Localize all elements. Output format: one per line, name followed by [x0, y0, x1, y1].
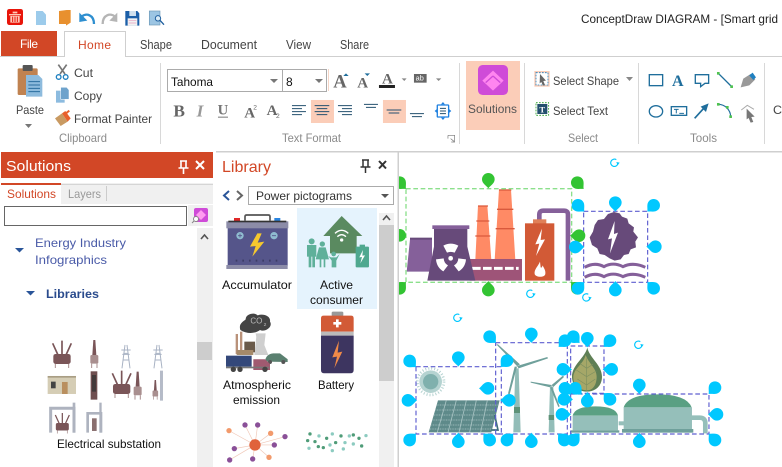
icon: previous library: [224, 191, 229, 200]
label: electrical substation: Electrical substation: [57, 437, 161, 451]
icon: undo: [79, 13, 94, 24]
icon: select shape: [534, 71, 550, 87]
icon: callout tool: [695, 75, 709, 87]
icon: underline: U: [218, 103, 229, 119]
font size combo: [282, 70, 326, 92]
label: format painter: Format Painter: [74, 112, 152, 126]
icon: dialog launcher: [448, 135, 455, 142]
library item: dots pictogram: [306, 432, 368, 452]
library item: atmospheric emission: 2: [264, 322, 267, 328]
pictogram: biofuel leaf: [572, 348, 602, 392]
tab: document: Document: [201, 38, 258, 52]
icon: arrow tool: [695, 103, 709, 118]
group label: tools: Tools: [690, 131, 717, 145]
scrollbar: [379, 213, 394, 467]
panel: solutions: [0, 151, 216, 467]
icon: ellipse tool: [649, 106, 663, 117]
window title: ConceptDraw DIAGRAM - [Smart grid: [581, 12, 778, 26]
tree item: energy industry infographics: [15, 236, 126, 267]
icon: superscript: A: [244, 105, 255, 121]
label: solutions: Solutions: [468, 102, 517, 116]
tab: solutions: Solutions: [7, 187, 56, 201]
label: active consumer: [310, 278, 363, 307]
library item: atmospheric emission: [223, 314, 291, 407]
font name combo: Tahoma: [171, 75, 213, 89]
icon: select text: T: [539, 105, 545, 115]
icon: grow font: A: [333, 71, 347, 92]
icon: print preview: [149, 11, 164, 25]
icon: select shape arrow: [626, 77, 633, 81]
tab: shape: Shape: [140, 38, 172, 52]
icon: node tool: [741, 105, 755, 123]
bottom row: renewable pictograms: [401, 314, 724, 449]
tab: file: [1, 31, 57, 56]
icons: alignment lines: [292, 104, 424, 117]
label: select text: Select Text: [553, 104, 609, 118]
font size combo: 8: [286, 75, 293, 89]
group label: text format: Text Format: [282, 131, 342, 145]
rotate handles: [527, 159, 620, 301]
pictogram: biogas tanks: [571, 394, 705, 433]
icon: superscript: 2: [253, 104, 257, 111]
quick access toolbar: [7, 9, 164, 26]
icon: next library: [237, 191, 242, 200]
library item: active consumer: [297, 208, 377, 309]
group label: clipboard: Clipboard: [59, 131, 107, 145]
icon: bold: B: [173, 102, 185, 121]
icon: application logo: [7, 9, 23, 25]
panel tabs: [1, 183, 213, 204]
icon: paste dropdown arrow: [25, 124, 32, 128]
label: atmospheric emission: [223, 378, 291, 407]
label: select shape: Select Shape: [553, 74, 619, 88]
library dropdown: Power pictograms: [256, 189, 352, 203]
icon: curve tool: [717, 103, 732, 118]
tab: home: Home: [78, 38, 111, 52]
ribbon group: tools: [649, 72, 756, 145]
tree item: energy industry infographics: Energy Industry: [35, 236, 126, 250]
label: active consumer: consumer: [310, 293, 363, 307]
icon: save: [125, 11, 139, 26]
button highlight: center align: [311, 100, 334, 123]
icon: text tool: A: [672, 73, 684, 90]
pictogram: gas generator: [525, 211, 568, 281]
label: atmospheric emission: emission: [233, 393, 280, 407]
icon: solutions: [478, 65, 508, 95]
selection frame: green: [406, 189, 572, 282]
icon: copy: [56, 87, 69, 103]
ribbon button: solutions: [466, 61, 520, 130]
label: copy: Copy: [74, 89, 102, 103]
format buttons: [173, 71, 455, 142]
icon: pin: [360, 160, 370, 173]
icon: close: [196, 161, 204, 169]
panel header: Solutions: [6, 158, 71, 175]
pictogram: hydro turbine: [585, 212, 645, 277]
pictogram: wind turbines: [496, 344, 564, 432]
handles: cyan: [401, 328, 724, 449]
selection frame: blue: [584, 211, 648, 282]
ribbon group: text format: [168, 69, 455, 145]
icon: close: [379, 161, 386, 168]
ribbon tabs: [0, 31, 782, 58]
library item: accumulator: [222, 215, 292, 292]
icon: italic: I: [196, 102, 205, 121]
library item: atmospheric emission: CO: [250, 316, 262, 325]
library thumbnail: electrical substation: [48, 340, 163, 451]
font name combo: [168, 70, 282, 92]
label: active consumer: Active: [320, 278, 353, 292]
icon: format painter: [55, 111, 71, 126]
group label: select: Select: [568, 131, 599, 145]
icon: font color: A: [382, 71, 393, 87]
icon: scissors: [56, 65, 68, 79]
handles: cyan: [569, 196, 663, 297]
panel header: [1, 152, 213, 178]
handles: green: [391, 173, 588, 297]
search box: [4, 206, 186, 226]
pictogram: sun and solar panel: [417, 368, 500, 432]
icon: rectangle tool: [649, 75, 663, 86]
scrollbar: [197, 228, 213, 467]
icon: paste: [18, 65, 42, 97]
clipped ribbon glyph: C: [773, 103, 782, 117]
icon: line tool: [717, 72, 733, 88]
library dropdown: [248, 186, 394, 204]
tab: layers: Layers: [68, 187, 101, 201]
icon: search solutions: [188, 205, 213, 226]
label: paste: Paste: [16, 103, 44, 117]
rotate handles: [454, 314, 644, 348]
icon: text highlight: [402, 74, 441, 83]
ribbon group: clipboard: [16, 65, 152, 145]
tab: home: [64, 32, 126, 58]
icon: text autofit: [435, 102, 451, 120]
icon: subscript: 2: [276, 113, 280, 120]
icon: shrink font: A: [357, 75, 368, 91]
top row: power plant pictograms: [391, 159, 663, 301]
tree item: libraries: Libraries: [46, 287, 99, 301]
icon: pin: [178, 161, 188, 174]
tab: share: Share: [340, 38, 369, 52]
label: accumulator: Accumulator: [222, 278, 292, 292]
tree item: libraries: [26, 287, 99, 301]
icon: new document: [36, 11, 46, 25]
label: atmospheric emission: Atmospheric: [223, 378, 291, 392]
label: cut: Cut: [74, 66, 94, 80]
icon: text box tool: [671, 107, 687, 115]
library item: battery: [318, 312, 354, 392]
tab: solutions: [1, 183, 61, 204]
icon: subscript: A: [267, 103, 278, 119]
button highlight: vertical middle: [383, 100, 406, 123]
panel title: Library: [222, 159, 271, 176]
icon: pen tool: [741, 73, 756, 87]
library item: network pictogram: [226, 422, 288, 463]
tab: view: View: [286, 38, 312, 52]
icon: font color: [379, 71, 395, 88]
icon: redo: [103, 13, 117, 24]
pictogram: nuclear plant: [407, 189, 522, 281]
ribbon group: select: [534, 71, 633, 145]
icon: text highlight: ab: [416, 74, 424, 83]
icon: open folder: [59, 10, 71, 26]
canvas: energy drawing: [391, 151, 782, 467]
panel: library: [216, 151, 399, 467]
selection frames: blue: [416, 343, 709, 434]
tree item: energy industry infographics: Infographics: [35, 253, 107, 267]
label: battery: Battery: [318, 378, 354, 392]
tab: file: File: [20, 37, 38, 51]
